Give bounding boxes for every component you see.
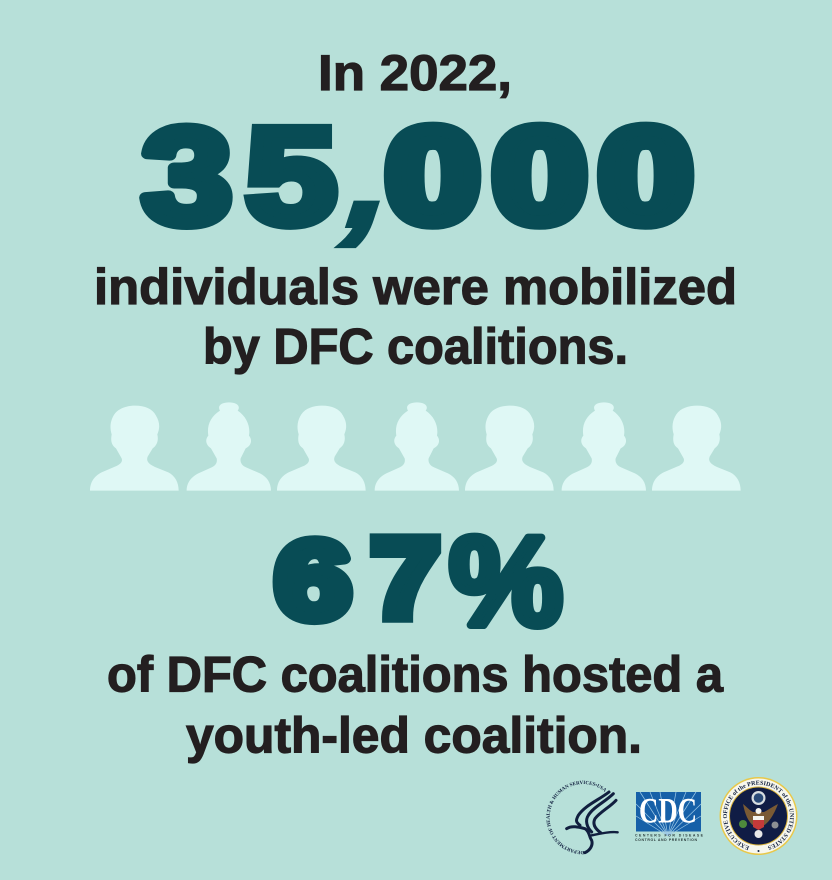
- logo: CDC: [635, 790, 704, 842]
- big number: 67%: [275, 510, 563, 652]
- clouds: [754, 830, 762, 838]
- logo: CDC: CONTROL AND PREVENTION: [635, 838, 697, 842]
- eagle crest: [752, 791, 766, 805]
- person 4: [375, 402, 459, 491]
- icon row: seven people: [90, 402, 741, 491]
- olive branch: [739, 820, 747, 828]
- person 3: [277, 406, 366, 491]
- big number: 35,000: 0: [386, 102, 480, 250]
- text block: youth-led coalition: youth-led coalition.: [186, 708, 642, 764]
- text block: youth-led coalition: of DFC coalitions hosted a: [107, 646, 724, 702]
- seal dot: [758, 850, 760, 852]
- person 2: [187, 402, 271, 491]
- text block: individuals mobilized: by DFC coalitions.: [203, 318, 628, 374]
- big number: 35,000: 0: [493, 102, 586, 250]
- person 1: [90, 406, 179, 491]
- big number: 35,000: 5: [246, 100, 336, 252]
- big number: 67%: 6: [275, 519, 351, 642]
- logo: Executive Office seal: EXECUTIVE OFFICE of the PRESIDENT of the UNITED STATES: [723, 780, 794, 850]
- eagle wings: [743, 804, 778, 826]
- heading: In 2022: In 2022,: [318, 45, 512, 101]
- big number: 35,000: 3: [142, 100, 232, 252]
- big number: 67%: %: [449, 510, 563, 652]
- person 7: [652, 406, 741, 491]
- logo: CDC: CDC: [639, 790, 697, 830]
- text block: individuals mobilized: [94, 259, 737, 374]
- big number: 35,000: ,: [332, 107, 415, 252]
- big number: 67%: 7: [371, 516, 440, 640]
- big number: 35,000: [142, 100, 692, 252]
- arrows: [772, 822, 778, 828]
- eagle head: [756, 808, 762, 814]
- logo: HHS: DEPARTMENT OF HEALTH & HUMAN SERVICES•USA: [546, 780, 606, 854]
- shield: [753, 816, 764, 820]
- person 5: [465, 406, 554, 491]
- big number: 35,000: 0: [599, 102, 692, 250]
- logo: CDC: CENTERS FOR DISEASE: [635, 834, 704, 838]
- text block: youth-led coalition: [107, 646, 724, 764]
- person 6: [562, 402, 646, 491]
- eagle: [567, 792, 618, 853]
- text block: individuals mobilized: individuals were mobilized: [94, 259, 737, 315]
